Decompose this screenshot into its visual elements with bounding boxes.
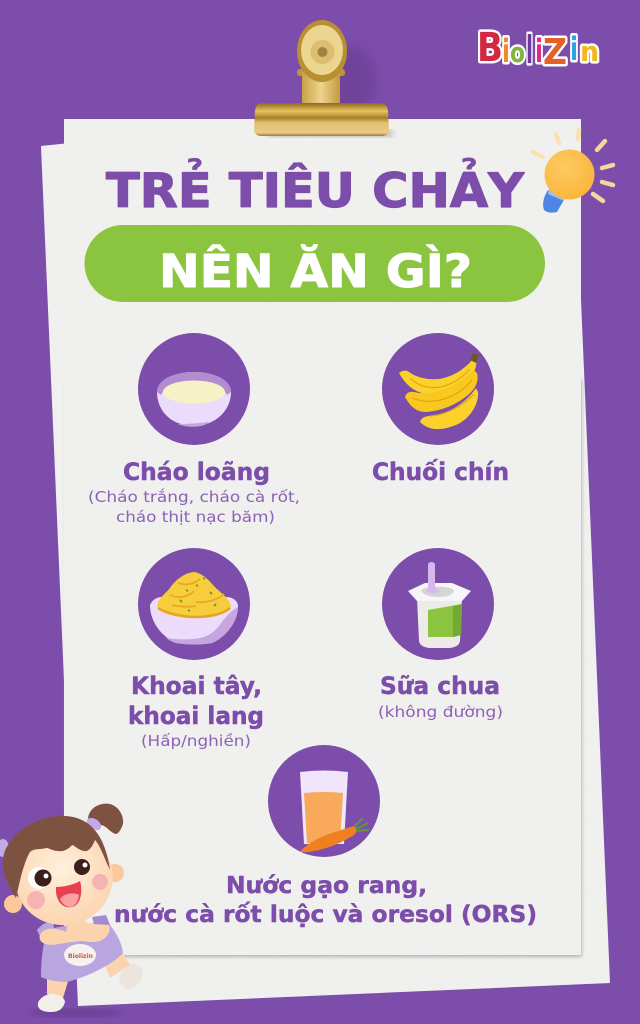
- badge: [64, 944, 96, 966]
- label: drinks: Nước gạo rang,: [226, 873, 427, 899]
- logo: Biolizin: n: [580, 35, 599, 68]
- icon: mashed potato bowl: [138, 548, 250, 660]
- logo: Biolizin: B: [477, 25, 503, 71]
- hair: [3, 816, 110, 898]
- head: [5, 820, 123, 936]
- cheeks: [92, 874, 108, 890]
- icon: bananas: [382, 333, 494, 445]
- label: Khoai tây, khoai lang: [128, 672, 264, 730]
- item: ripe banana: [372, 333, 509, 486]
- logo: Biolizin: i: [535, 32, 543, 70]
- sublabel: cháo thịt nạc băm): [116, 508, 275, 526]
- sublabel: (Cháo trắng, cháo cà rốt,: [88, 488, 300, 506]
- sublabel: (không đường): [378, 703, 503, 721]
- item: drinks: [114, 745, 537, 928]
- heading pill: [84, 225, 545, 302]
- label: Sữa chua: Sữa chua: [380, 672, 500, 700]
- label: Khoai tây, khoai lang: khoai lang: [128, 702, 264, 730]
- item: potato: [128, 548, 264, 750]
- icon: yogurt cup: [382, 548, 494, 660]
- icon: gold bulldog clip: [254, 20, 393, 137]
- logo: Biolizin: i: [502, 32, 510, 70]
- logo: Biolizin: o: [510, 36, 525, 69]
- icon: glass of carrot juice: [268, 745, 380, 857]
- icon: porridge bowl: [138, 333, 250, 445]
- ears: [106, 864, 124, 882]
- logo: Biolizin: Z: [543, 32, 567, 73]
- label: Chuối chín: Chuối chín: [372, 458, 509, 486]
- label: drinks: nước cà rốt luộc và oresol (ORS): [114, 901, 537, 928]
- mouth: [56, 881, 81, 907]
- heading pill: NÊN ĂN GÌ?: [159, 245, 472, 298]
- dress: [41, 923, 123, 982]
- badge: Biolizin: [68, 953, 93, 960]
- sublabel: (Hấp/nghiền): [141, 732, 251, 750]
- logo: Biolizin: i: [570, 30, 578, 68]
- sublabel: [88, 488, 300, 526]
- label: drinks: [114, 873, 537, 928]
- item: yogurt: [378, 548, 503, 721]
- arms: [40, 917, 110, 945]
- icon: light bulb: [533, 130, 613, 213]
- character: girl mascot: [0, 804, 143, 1017]
- panel: back paper sheet: [41, 143, 610, 1006]
- item: rice porridge: [88, 333, 300, 526]
- logo: Biolizin: l: [526, 28, 533, 72]
- logo: Biolizin: [477, 25, 599, 73]
- bun: [88, 804, 123, 834]
- label: Khoai tây, khoai lang: Khoai tây,: [131, 672, 262, 700]
- title: TRẺ TIÊU CHẢY: [106, 159, 525, 219]
- legs: [47, 975, 69, 998]
- label: Cháo loãng: Cháo loãng: [123, 458, 270, 486]
- panel: front paper sheet: [64, 119, 582, 957]
- eyes: [74, 859, 90, 875]
